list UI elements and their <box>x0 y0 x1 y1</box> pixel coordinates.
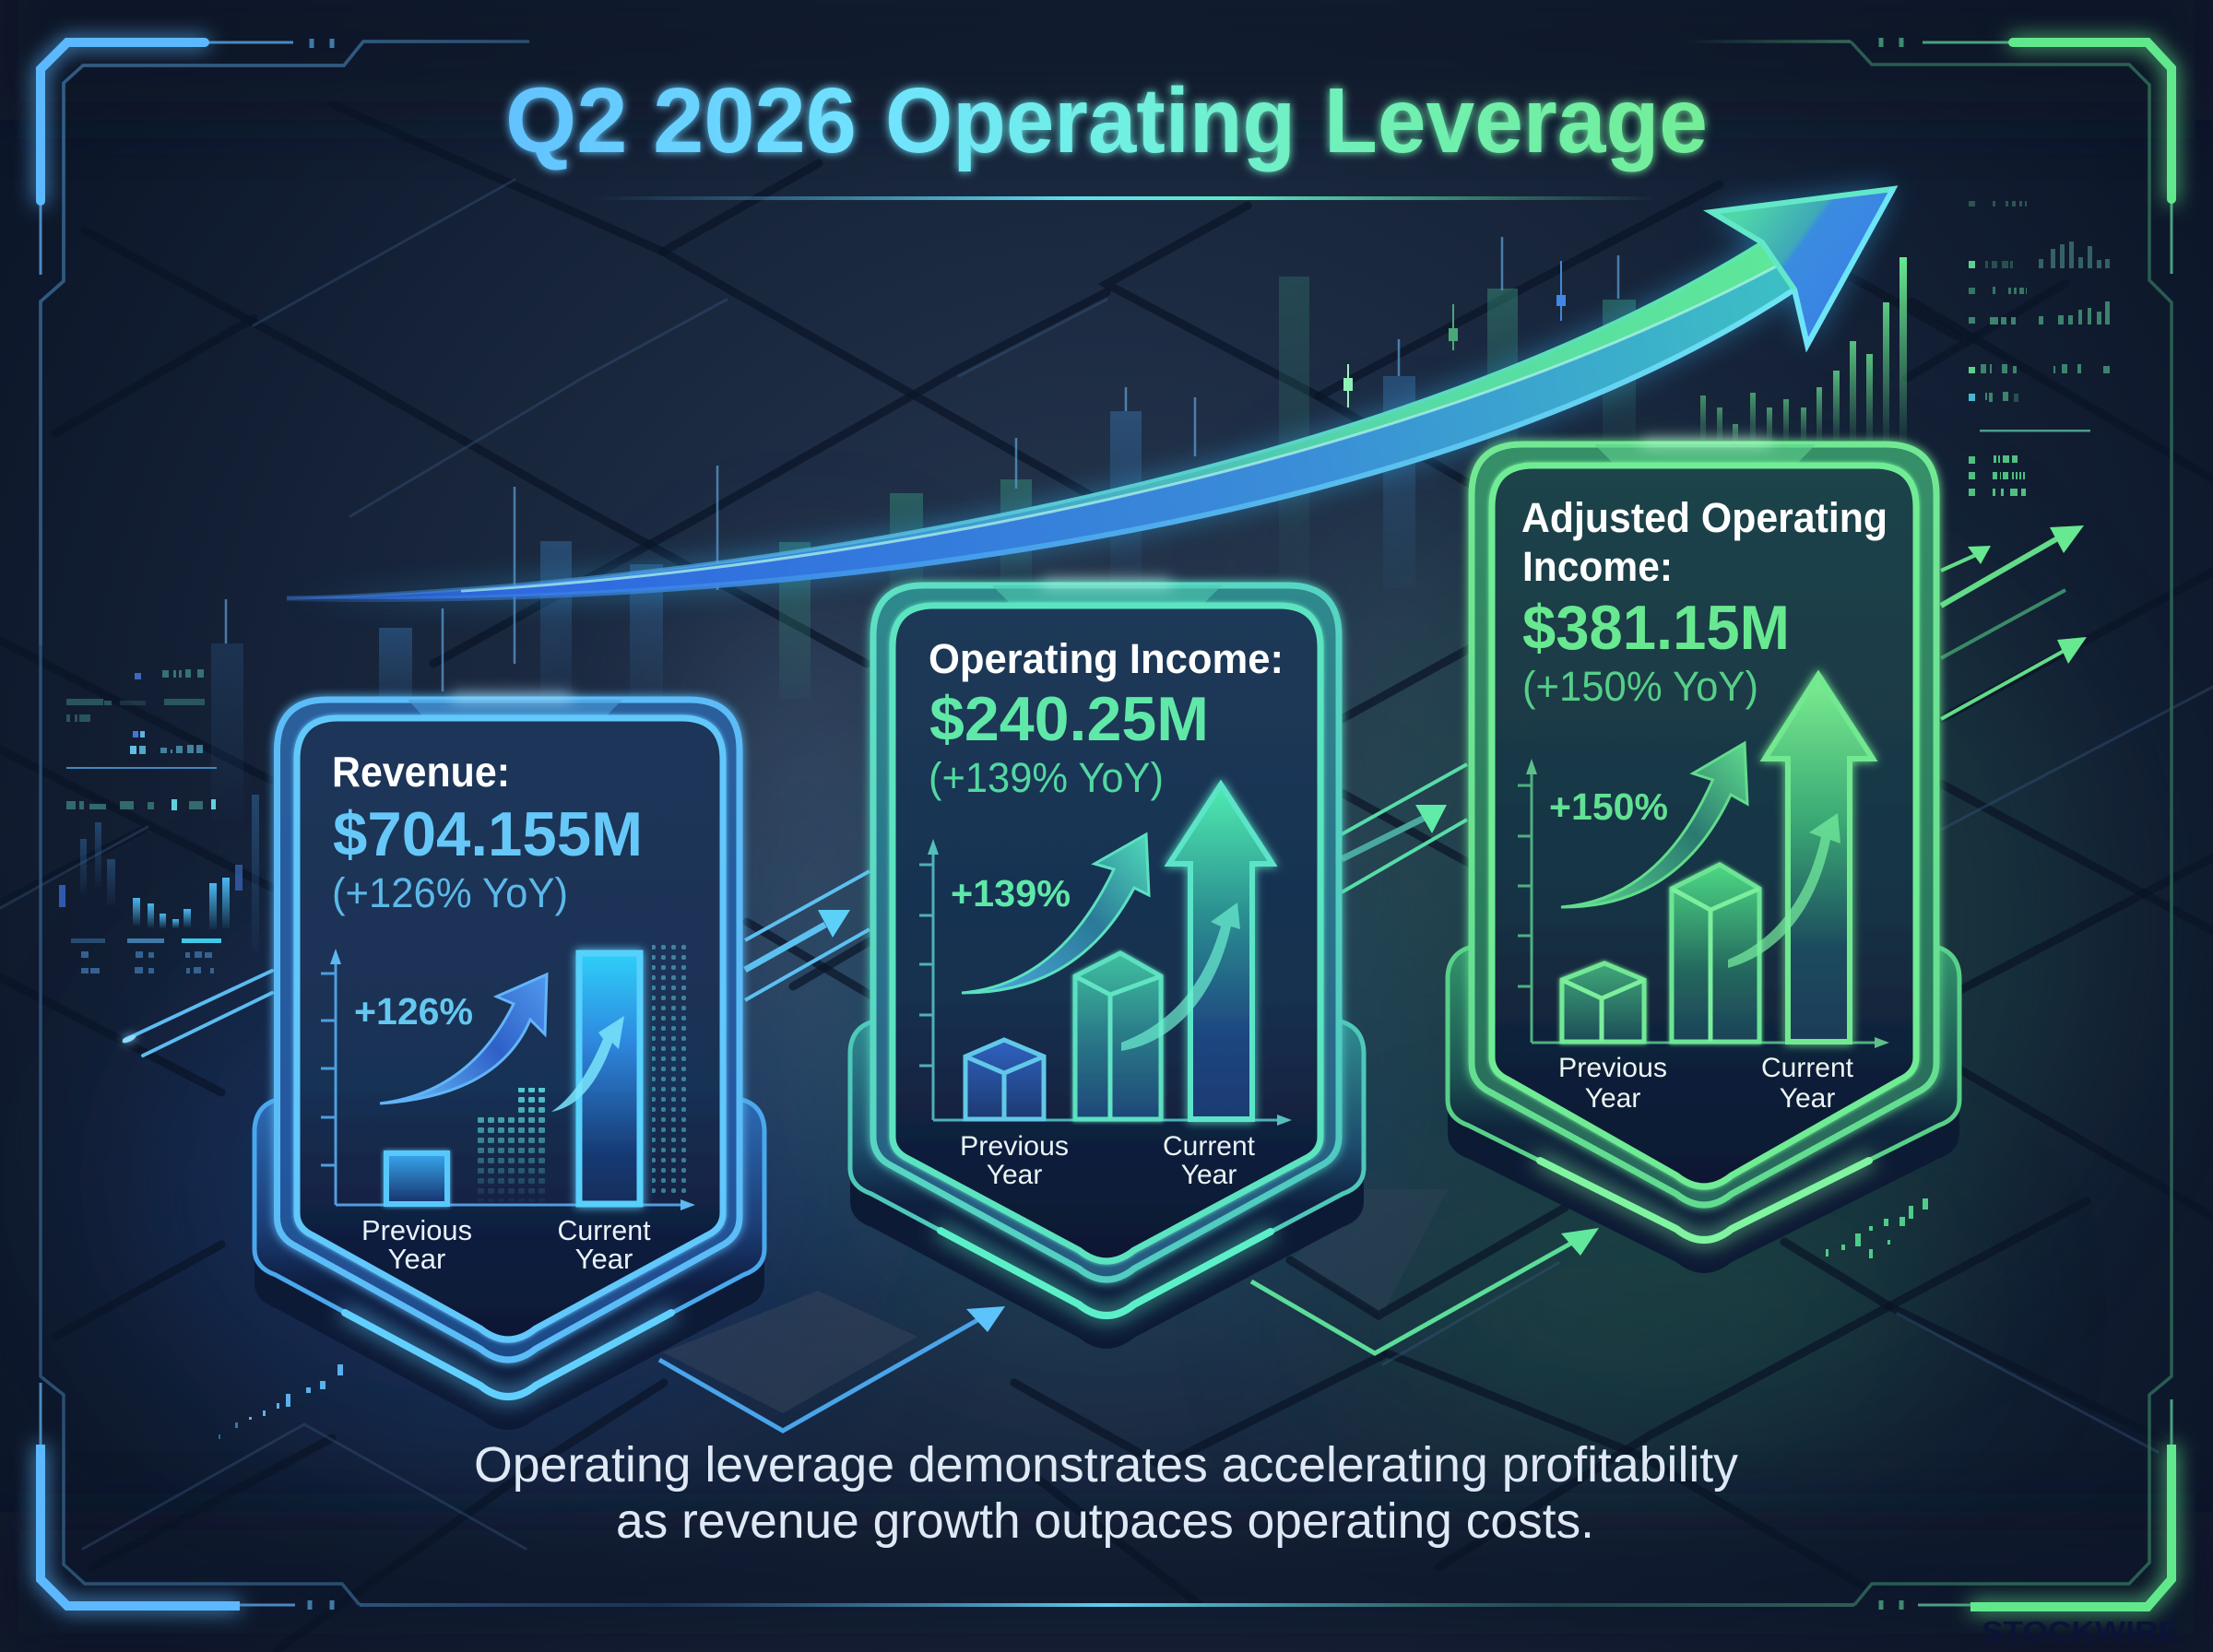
card 2 heading: Operating Income: <box>929 635 1284 682</box>
card 1 label: previous year: Previous <box>361 1214 472 1246</box>
title: Leverage <box>1324 69 1708 172</box>
card 3 frame <box>1448 440 1959 1273</box>
card 2 label: current year: Current <box>1163 1131 1256 1162</box>
panel: adjusted operating income card <box>1448 440 1959 1273</box>
card 2 yoy: (+139% YoY) <box>929 754 1164 801</box>
card 3 label: previous year second line: Year <box>1585 1083 1640 1114</box>
background candlestick bars <box>211 237 1636 820</box>
connector arrows: card 1 to card 2 <box>745 871 870 1000</box>
hud frame: bottom right corner <box>1881 1399 2172 1610</box>
bottom centre line <box>360 1603 1854 1607</box>
card 1 label: previous year second line: Year <box>388 1243 445 1275</box>
right data marks <box>1969 201 2110 496</box>
hud frame: bottom left corner <box>41 1383 332 1610</box>
card 3 chart <box>1518 675 1889 1048</box>
footer text <box>474 1437 1738 1549</box>
card 3 callout: +150% <box>1549 785 1668 828</box>
card 2 callout: +139% <box>951 872 1071 914</box>
big growth arrow <box>287 189 1893 599</box>
card 2 label: previous year second line: Year <box>987 1160 1042 1190</box>
card 2 label: previous year: Previous <box>960 1131 1069 1162</box>
card 2 frame <box>850 581 1364 1349</box>
connector arrows: out of card 3 <box>1941 525 2087 719</box>
card 3 label: current year second line: Year <box>1780 1083 1835 1114</box>
card 3 heading line 1: Adjusted Operating <box>1521 494 1888 541</box>
card 1 frame <box>254 694 764 1430</box>
panel: revenue card <box>254 694 764 1430</box>
card 1 yoy: (+126% YoY) <box>332 869 568 916</box>
small green bar cluster <box>1700 257 1907 442</box>
hud frame: top left corner <box>41 39 529 1605</box>
floor arrow: green <box>1251 1228 1599 1353</box>
hud frame: top right corner <box>1685 38 2172 1605</box>
card 3 label: previous year: Previous <box>1558 1053 1667 1083</box>
card 2 value: $240.25M <box>929 684 1209 754</box>
connector arrows: card 2 to card 3 <box>1342 764 1467 892</box>
title underline <box>590 196 1660 200</box>
watermark: STOCKWIRE <box>1982 1615 2180 1647</box>
card 1 heading: Revenue: <box>332 748 510 796</box>
floor arrow: blue <box>659 1306 1005 1431</box>
title <box>505 69 1708 172</box>
card 1 label: current year second line: Year <box>575 1243 633 1275</box>
left data marks <box>59 669 259 974</box>
card 3 value: $381.15M <box>1522 593 1790 663</box>
connector arrows: into card 1 <box>121 971 272 1056</box>
card 1 label: current year: Current <box>557 1214 651 1246</box>
card 3 heading line 2: Income: <box>1522 543 1673 590</box>
card 1 value: $704.155M <box>333 799 643 869</box>
card 3 yoy: (+150% YoY) <box>1522 663 1758 710</box>
card 2 label: current year second line: Year <box>1181 1160 1237 1190</box>
small dot trail: right <box>1826 1198 1928 1258</box>
small dot trail: left <box>219 1364 343 1439</box>
card 2 chart <box>919 785 1292 1126</box>
card 1 chart <box>321 940 695 1210</box>
card 1 callout: +126% <box>354 990 473 1032</box>
card 3 label: current year: Current <box>1761 1053 1854 1083</box>
title: Operating <box>885 69 1296 172</box>
panel: operating income card <box>850 581 1364 1349</box>
title: Q2 2026 <box>505 69 857 172</box>
footer line 1: Operating leverage demonstrates accelerating profitability <box>474 1437 1738 1493</box>
footer line 2: as revenue growth outpaces operating costs. <box>616 1493 1594 1549</box>
